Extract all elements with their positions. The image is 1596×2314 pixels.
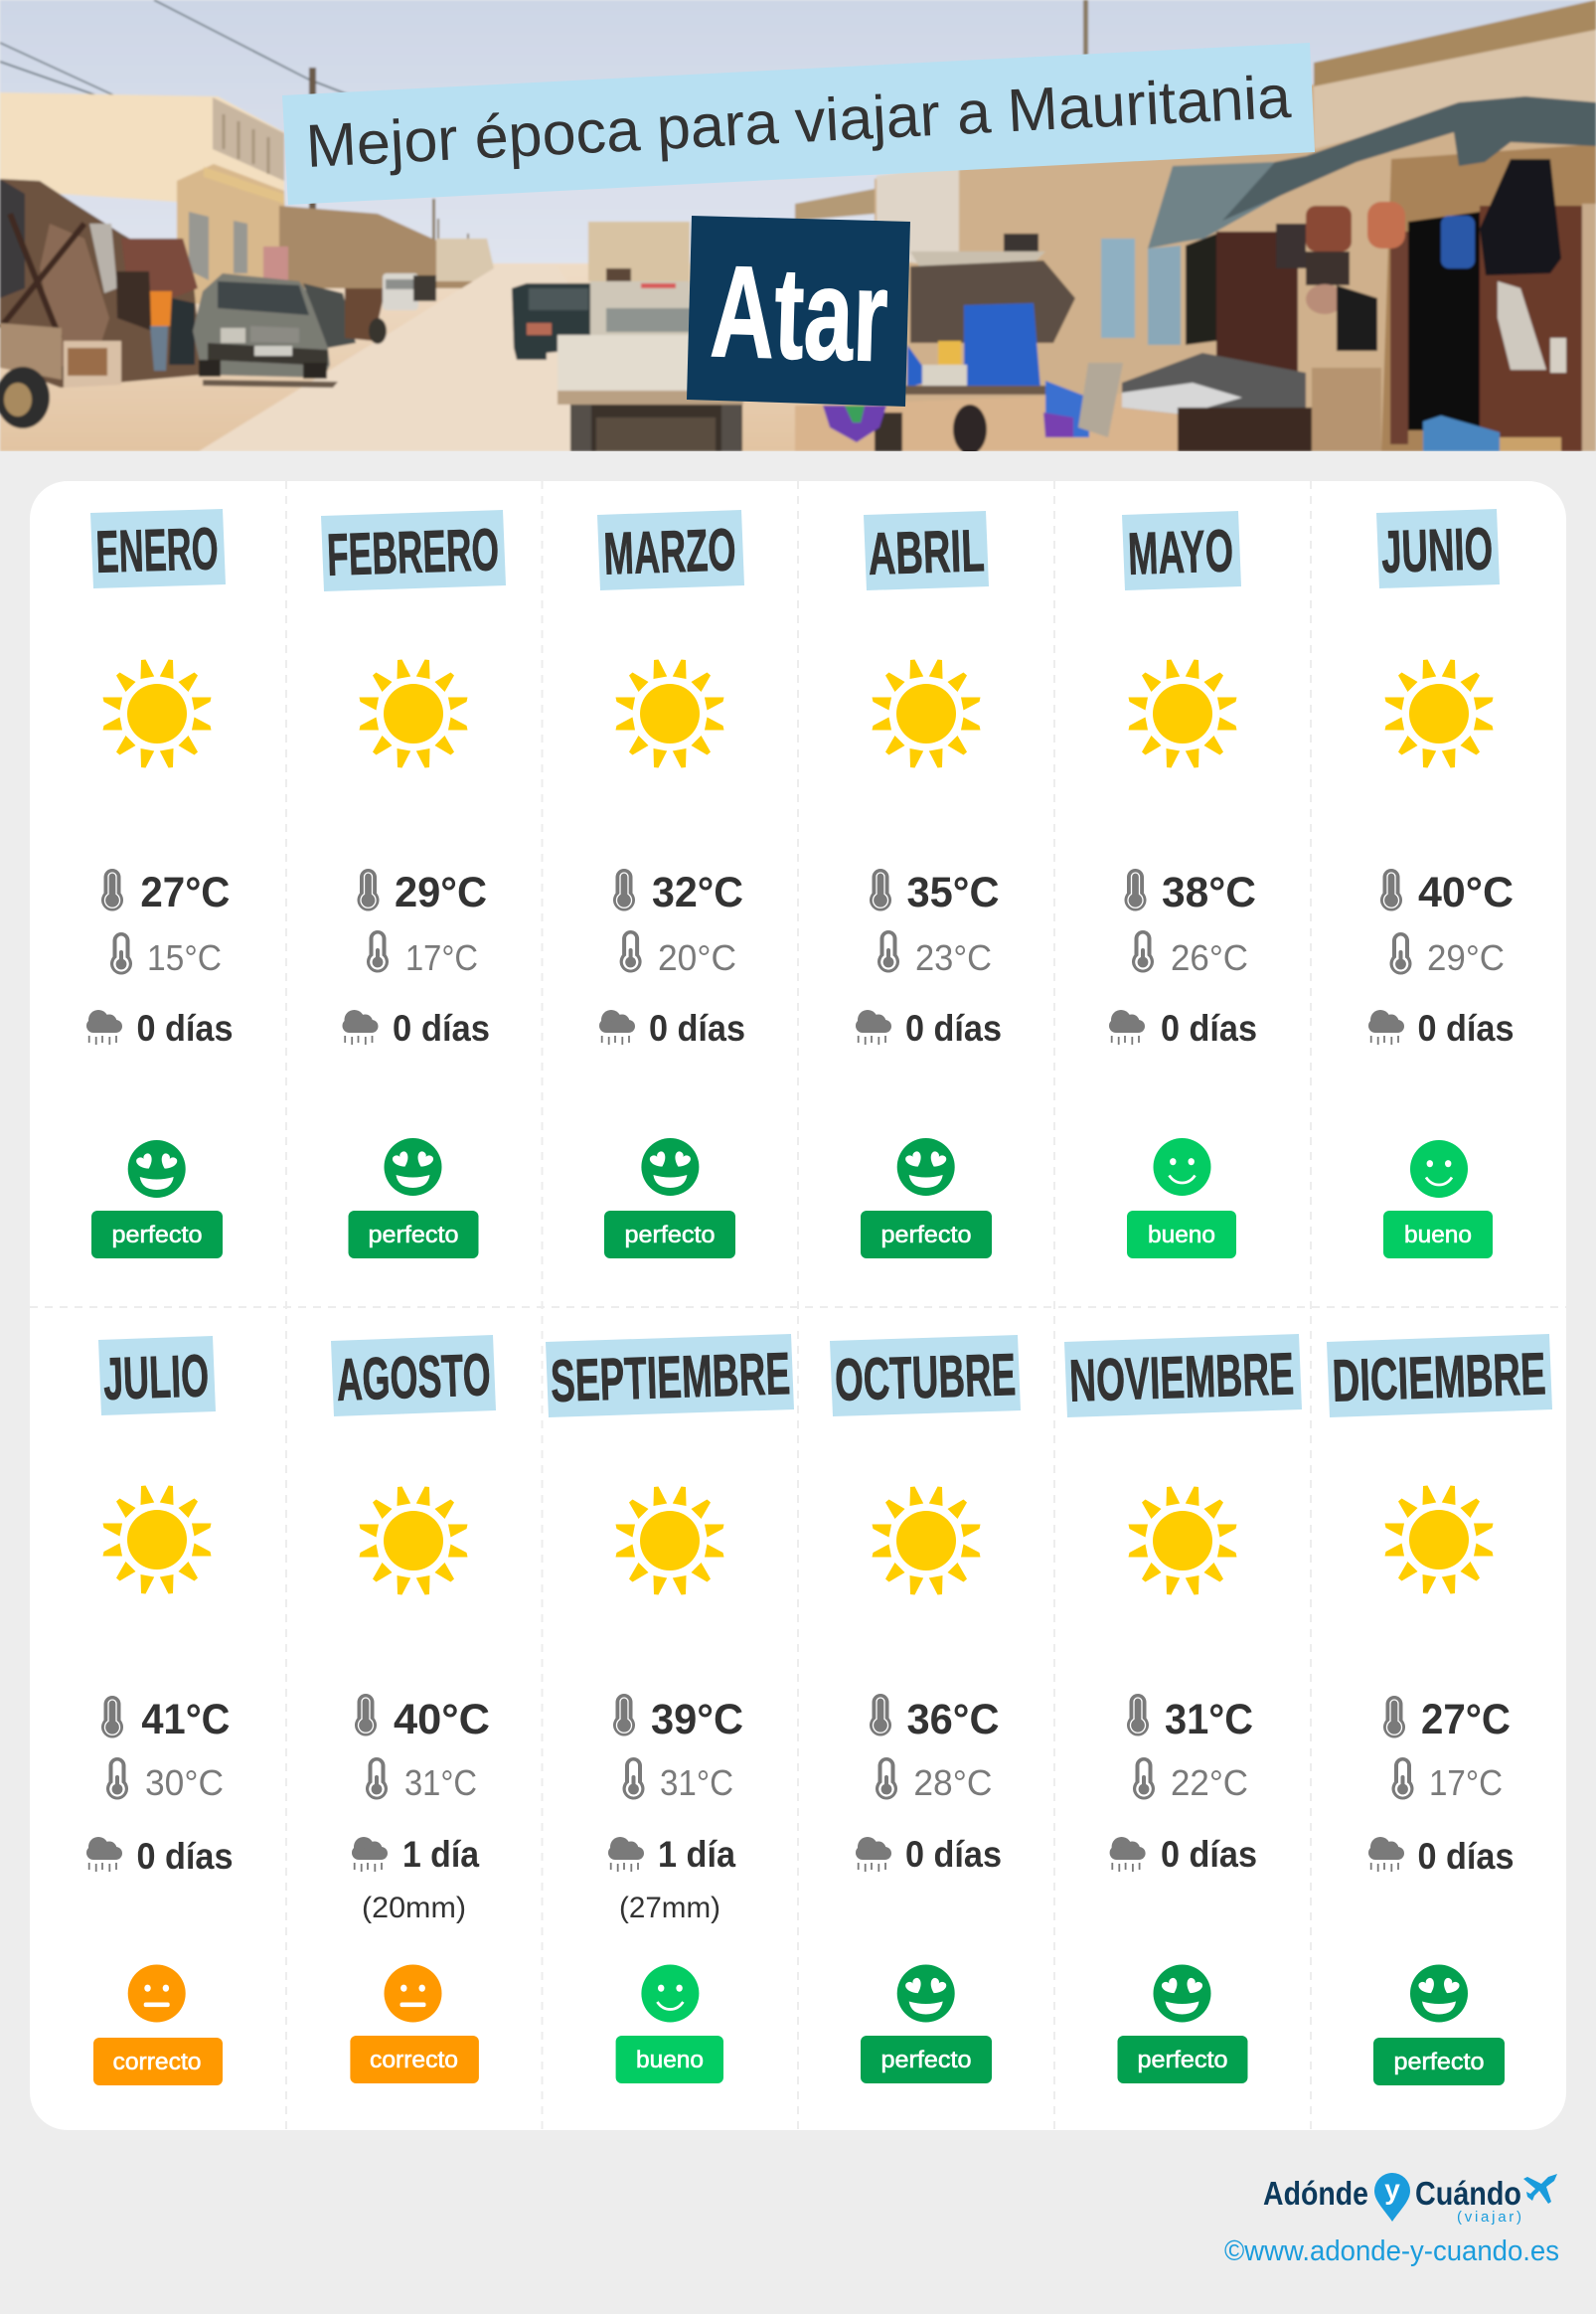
rating: perfecto <box>1373 1964 1505 2085</box>
low temperature <box>1391 1757 1503 1803</box>
icon: sun <box>873 1487 980 1594</box>
high temperature: 35°C <box>906 869 1000 916</box>
high temperature: 41°C <box>141 1696 230 1743</box>
icon: map pin: y <box>1384 2174 1400 2205</box>
icon: sun <box>1129 660 1236 767</box>
high temperature: 32°C <box>652 869 743 916</box>
month heading: agosto <box>331 1335 496 1416</box>
high temperature <box>358 869 487 916</box>
rainy days: 0 días <box>1417 1008 1515 1049</box>
icon: map pin <box>1374 2173 1410 2222</box>
month heading: marzo: MARZO <box>602 516 737 587</box>
high temperature: 31°C <box>1165 1696 1253 1743</box>
rating: perfecto <box>1117 1964 1248 2083</box>
rainy days: 0 días <box>1161 1834 1257 1875</box>
high temperature <box>1383 1696 1511 1743</box>
high temperature: 40°C <box>394 1696 490 1743</box>
month heading: agosto: AGOSTO <box>335 1341 492 1413</box>
month heading: noviembre: NOVIEMBRE <box>1068 1340 1295 1414</box>
main white card <box>30 481 1566 2130</box>
icon: sun <box>873 660 980 767</box>
rating: perfecto <box>348 1138 479 1258</box>
rating: perfecto <box>861 1964 992 2083</box>
rainy days <box>1368 1008 1515 1049</box>
high temperature <box>1127 1694 1253 1743</box>
panel: febrero <box>321 510 506 1258</box>
icon: sun <box>103 1485 211 1594</box>
month heading: enero <box>90 509 226 588</box>
rating: perfecto: perfecto <box>880 1222 972 1248</box>
panel: julio <box>86 1336 233 2085</box>
month heading: junio: JUNIO <box>1380 515 1494 585</box>
low temperature: 20°C <box>658 937 736 978</box>
low temperature <box>1389 932 1505 978</box>
rainy days <box>608 1834 735 1924</box>
high temperature: 40°C <box>1418 869 1514 916</box>
icon: sun <box>1129 1487 1236 1594</box>
month heading: mayo: MAYO <box>1127 517 1234 587</box>
low temperature <box>110 932 222 978</box>
title banner <box>282 43 1315 205</box>
icon: sun <box>1385 1485 1493 1594</box>
rating: correcto <box>350 1964 479 2083</box>
low temperature <box>1133 1757 1248 1803</box>
rainy days: 0 días <box>649 1008 745 1049</box>
low temperature: 29°C <box>1427 937 1505 978</box>
rainy days <box>1368 1836 1515 1877</box>
high temperature <box>870 869 1000 916</box>
low temperature <box>106 1757 224 1803</box>
month heading: julio: JULIO <box>102 1342 210 1412</box>
city name banner: Atar <box>709 238 889 389</box>
rating: correcto <box>93 1964 223 2085</box>
logo: Adónde y Cuándo: (viajar) <box>1457 2209 1521 2226</box>
rainy days: (20mm) <box>362 1892 466 1924</box>
icon: sun <box>616 660 723 767</box>
low temperature: 22°C <box>1171 1762 1248 1803</box>
rating: perfecto: perfecto <box>111 1222 203 1248</box>
high temperature: 27°C <box>140 869 230 916</box>
high temperature <box>101 869 230 916</box>
high temperature: 36°C <box>906 1696 1000 1743</box>
month heading: febrero <box>321 510 506 591</box>
icon: sun <box>616 1487 723 1594</box>
rating: bueno <box>1127 1138 1236 1258</box>
rainy days <box>1109 1008 1257 1049</box>
rainy days <box>86 1836 233 1877</box>
panel: noviembre <box>1064 1334 1302 2083</box>
rainy days <box>599 1008 745 1049</box>
low temperature: 17°C <box>405 937 478 978</box>
rainy days <box>342 1008 490 1049</box>
rating: perfecto: perfecto <box>880 2047 972 2073</box>
low temperature <box>1132 930 1248 978</box>
month heading: abril: ABRIL <box>867 517 986 587</box>
month heading: abril <box>864 511 989 590</box>
high temperature: 29°C <box>395 869 487 916</box>
month heading: enero: ENERO <box>95 515 220 585</box>
panel: octubre <box>830 1335 1021 2083</box>
high temperature <box>613 869 743 916</box>
logo: Adónde y Cuándo <box>1263 2173 1557 2226</box>
rainy days: 0 días <box>1161 1008 1257 1049</box>
rainy days <box>86 1008 233 1049</box>
icon: plane <box>1523 2174 1557 2204</box>
rating: perfecto <box>604 1138 735 1258</box>
low temperature: 15°C <box>147 937 222 978</box>
low temperature <box>620 930 736 978</box>
panel: mayo <box>1109 511 1257 1258</box>
icon: sun <box>360 1487 467 1594</box>
rating: bueno: bueno <box>1148 1222 1215 1248</box>
rating: bueno: bueno <box>636 2047 704 2073</box>
icon: sun <box>360 660 467 767</box>
rainy days: 0 días <box>905 1834 1002 1875</box>
high temperature <box>870 1694 1000 1743</box>
rainy days <box>1110 1834 1257 1875</box>
high temperature: 38°C <box>1162 869 1256 916</box>
month heading: octubre <box>830 1335 1021 1416</box>
logo: Adónde y Cuándo: Adónde <box>1263 2175 1368 2212</box>
month heading: mayo <box>1122 511 1241 590</box>
low temperature <box>622 1757 733 1803</box>
rainy days: 0 días <box>137 1836 233 1877</box>
panel: junio <box>1368 509 1515 1258</box>
low temperature <box>878 930 992 978</box>
rating: bueno <box>616 1964 723 2083</box>
month heading: septiembre: SEPTIEMBRE <box>550 1340 791 1414</box>
website credit: ©www.adonde-y-cuando.es <box>1224 2235 1559 2267</box>
rainy days: 0 días <box>137 1008 233 1049</box>
month heading: marzo <box>597 510 744 590</box>
panel: enero <box>86 509 233 1258</box>
low temperature: 23°C <box>915 937 992 978</box>
rainy days: (27mm) <box>619 1892 720 1924</box>
low temperature: 30°C <box>145 1762 224 1803</box>
icon: sun <box>103 660 211 767</box>
rating: perfecto: perfecto <box>624 1222 716 1248</box>
city name banner <box>687 216 910 407</box>
panel: septiembre <box>546 1334 794 2083</box>
rating: perfecto: perfecto <box>1393 2049 1485 2075</box>
rating: bueno: bueno <box>1404 1222 1472 1248</box>
high temperature <box>101 1696 230 1743</box>
high temperature <box>613 1694 743 1743</box>
rainy days: 0 días <box>393 1008 490 1049</box>
month heading: noviembre <box>1064 1334 1302 1417</box>
rating: perfecto: perfecto <box>1137 2047 1228 2073</box>
rating: perfecto <box>91 1140 223 1258</box>
month heading: junio <box>1376 509 1500 588</box>
rating: correcto: correcto <box>113 2049 201 2075</box>
month heading: julio <box>98 1336 216 1415</box>
rating: perfecto <box>861 1138 992 1258</box>
panel: agosto <box>331 1335 496 2083</box>
high temperature: 27°C <box>1421 1696 1511 1743</box>
rainy days <box>856 1834 1002 1875</box>
low temperature <box>366 1757 477 1803</box>
rainy days: 0 días <box>1417 1836 1515 1877</box>
rainy days: 1 día <box>658 1834 735 1875</box>
rainy days: 1 día <box>402 1834 479 1875</box>
low temperature: 17°C <box>1429 1762 1503 1803</box>
rating: bueno <box>1383 1140 1493 1258</box>
high temperature <box>355 1694 490 1743</box>
low temperature: 31°C <box>404 1762 477 1803</box>
logo: Adónde y Cuándo: Cuándo <box>1415 2175 1521 2212</box>
panel: marzo <box>597 510 745 1258</box>
hero photo: street in Atar <box>0 0 1596 454</box>
low temperature: 31°C <box>660 1762 733 1803</box>
month heading: febrero: FEBRERO <box>326 516 500 588</box>
rating: correcto: correcto <box>370 2047 458 2073</box>
panel: abril <box>856 511 1002 1258</box>
low temperature: 26°C <box>1171 937 1248 978</box>
panel: diciembre <box>1327 1334 1552 2085</box>
low temperature <box>876 1757 992 1803</box>
rainy days <box>352 1834 479 1924</box>
low temperature <box>367 930 478 978</box>
high temperature: 39°C <box>651 1696 743 1743</box>
rainy days: 0 días <box>905 1008 1002 1049</box>
title banner: Mejor época para viajar a Mauritania <box>304 63 1292 180</box>
rainy days <box>856 1008 1002 1049</box>
low temperature: 28°C <box>913 1762 992 1803</box>
icon: sun <box>1385 660 1493 767</box>
month heading: septiembre <box>546 1334 794 1417</box>
rating: perfecto: perfecto <box>368 1222 459 1248</box>
month heading: octubre: OCTUBRE <box>834 1341 1017 1413</box>
